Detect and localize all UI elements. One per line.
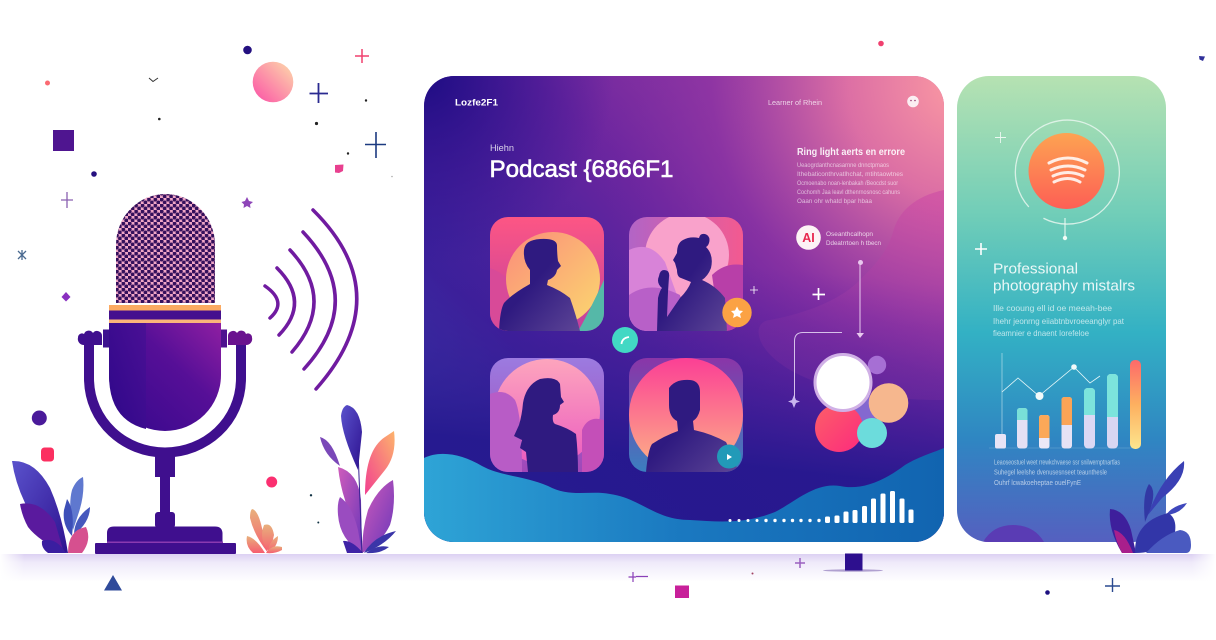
text block: ring light: Oaan ohr whatd bpar hbaa <box>797 198 872 205</box>
nav text: Learner of Rhein <box>768 98 822 107</box>
logo text: Lozfe2F1 <box>455 98 499 108</box>
mic yoke <box>78 330 252 452</box>
text block: ring light: Ring light aerts en errore <box>797 147 905 158</box>
icon: sparkle <box>812 288 825 300</box>
side heading <box>993 262 1135 294</box>
icon: ring with sound badge <box>1013 117 1122 240</box>
icon: play badge <box>717 444 741 468</box>
silhouette: man <box>499 239 580 331</box>
chart caption <box>994 460 1120 487</box>
plant: coral <box>247 509 282 553</box>
plant: right of microphone <box>320 405 396 553</box>
plant: left <box>12 461 90 553</box>
chart caption: Ouhrf lcwakoeheptae ouelFynE <box>994 480 1081 487</box>
portrait card 3 <box>490 358 604 472</box>
mic body <box>109 323 221 431</box>
equalizer bars <box>728 491 914 523</box>
AI badge: AI <box>802 231 815 245</box>
floor gradient band <box>0 554 1216 582</box>
side heading: Professional <box>993 262 1078 278</box>
plant: side card <box>1110 461 1191 553</box>
side heading: photography mistalrs <box>993 278 1135 294</box>
icon: face <box>907 96 919 107</box>
text block: ring light: Ocmoenabo noan-lenbakah /Beocdst suor <box>797 180 899 187</box>
text block: ring light: Cochomh Jaa leavl dthenrnosnosc cahuns <box>797 189 901 196</box>
silhouette: woman long hair <box>514 378 578 472</box>
portrait card 1 <box>490 217 604 331</box>
AI badge: Ddeatrrtoen h tbecn <box>826 240 881 247</box>
panel: main podcast card <box>424 76 944 542</box>
sound waves <box>265 210 357 389</box>
text block: ring light: Ithebaticonthrvatlhchat, mtihtaowtnes <box>797 171 904 178</box>
side body text <box>993 303 1125 338</box>
text block: ring light: Ueaogrdanthcnasarnne dnnctpmaos <box>797 162 890 169</box>
AI badge <box>796 225 881 250</box>
silhouette: woman with microphone <box>657 234 727 331</box>
mic grille <box>116 194 215 303</box>
AI badge: Oseanthcalhopn <box>826 231 873 238</box>
chart caption: Suhegel leelshe dvenusesnseet teaunthesle <box>994 470 1107 476</box>
silhouette: man front <box>646 380 738 472</box>
side body text: Ille cooung ell id oe meeah-bee <box>993 303 1112 313</box>
icon: microphone <box>78 194 252 554</box>
circle cluster <box>815 354 908 452</box>
text block: ring light <box>797 147 905 205</box>
mic stand <box>95 452 236 554</box>
heading: Podcast {6866F1 <box>490 156 674 183</box>
icon: sparkles <box>975 132 1006 255</box>
bar chart <box>989 353 1141 449</box>
chart caption: Leaoseostuel weet rrewkchvaese ssr snilwernptnartlas <box>994 460 1120 466</box>
side body text: fieamnier e dnaent Iorefeloe <box>993 328 1089 338</box>
side body text: Ihehr jeonrng eiiabtnbvroeeanglyr pat <box>993 316 1125 326</box>
portrait card 2 <box>629 213 743 331</box>
subheading: Hiehn <box>490 143 514 153</box>
mic bands <box>109 305 221 323</box>
panel: side card <box>957 76 1166 542</box>
portrait card 4 <box>629 358 743 472</box>
icon: teal badge <box>612 327 638 353</box>
icon: orange star badge <box>722 298 752 327</box>
arrow: elbow connector <box>788 332 842 408</box>
icon: small sparkle <box>750 286 758 294</box>
arrow: vertical connector <box>856 260 864 338</box>
